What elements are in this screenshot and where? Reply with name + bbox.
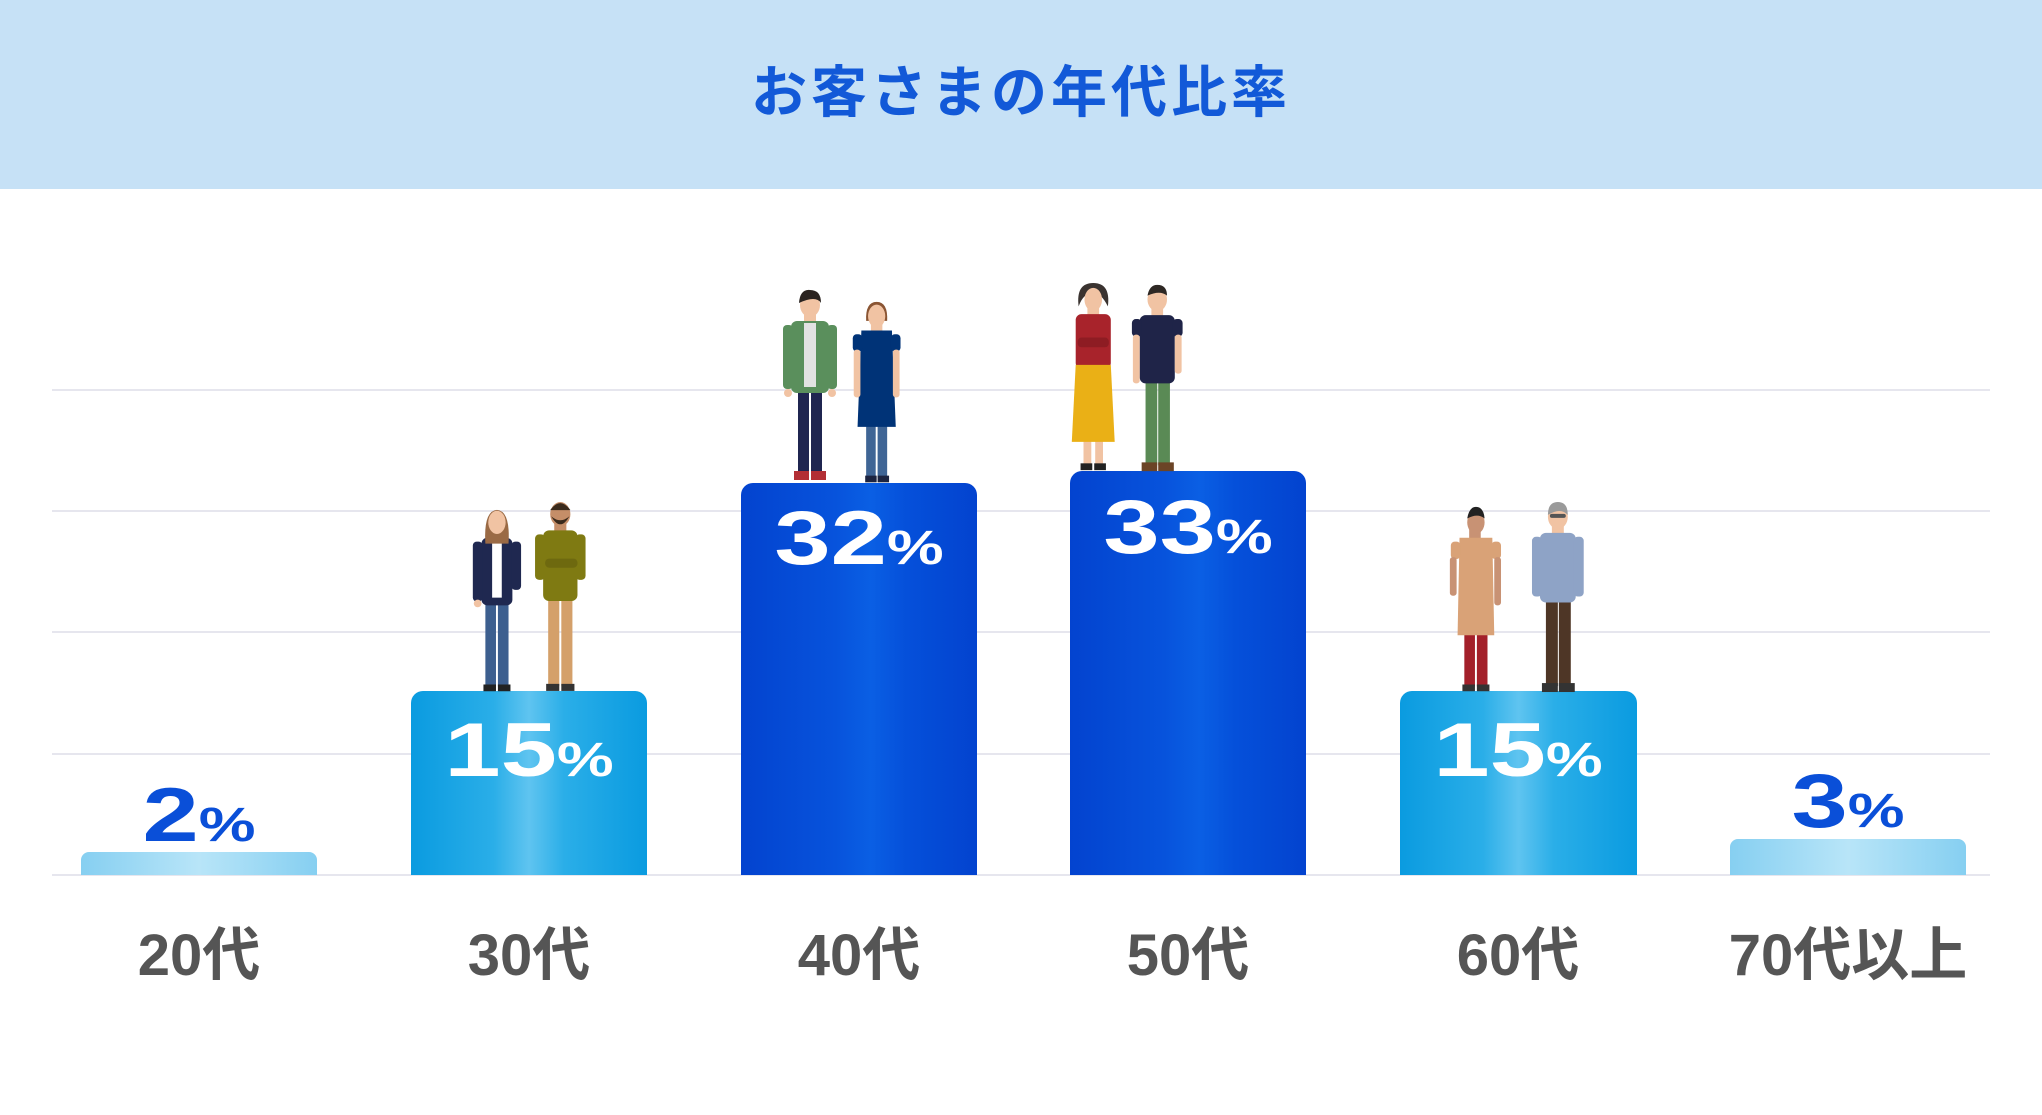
- title: お客さまの年代比率: [751, 61, 1291, 124]
- bar: 50代: [1070, 471, 1306, 875]
- axis labels: 50代: [1127, 923, 1249, 988]
- axis labels: 30代: [468, 923, 590, 988]
- people: 60代 woman: [1450, 507, 1501, 691]
- people: 30代 man: [535, 502, 586, 691]
- axis labels: 40代: [798, 923, 920, 988]
- bar: 30代: [411, 691, 647, 875]
- value: 60代 15%: 15%: [1433, 708, 1603, 793]
- people: 30代 woman: [473, 510, 521, 691]
- people: 40代 man: [783, 290, 837, 480]
- bar: 40代: [741, 483, 977, 875]
- bar: 70代以上: [1730, 839, 1966, 875]
- axis labels: 20代: [138, 923, 260, 988]
- value: 30代 15%: 15%: [444, 708, 614, 793]
- bar: 20代: [81, 852, 317, 875]
- axis labels: [138, 923, 1967, 988]
- axis labels: 70代以上: [1729, 923, 1967, 988]
- header band: [0, 0, 2042, 189]
- people: 50代 woman: [1072, 283, 1115, 470]
- axis labels: 60代: [1457, 923, 1579, 988]
- value: 3%: 3%: [1791, 759, 1905, 844]
- people: 50代 man: [1132, 285, 1183, 471]
- bar: 60代: [1400, 691, 1637, 875]
- value: 32%: 32%: [774, 496, 944, 581]
- people: 60代 man: [1532, 502, 1584, 692]
- value: 33%: 33%: [1103, 485, 1273, 570]
- people: 40代 woman: [853, 302, 901, 482]
- value: 2%: 2%: [142, 773, 256, 858]
